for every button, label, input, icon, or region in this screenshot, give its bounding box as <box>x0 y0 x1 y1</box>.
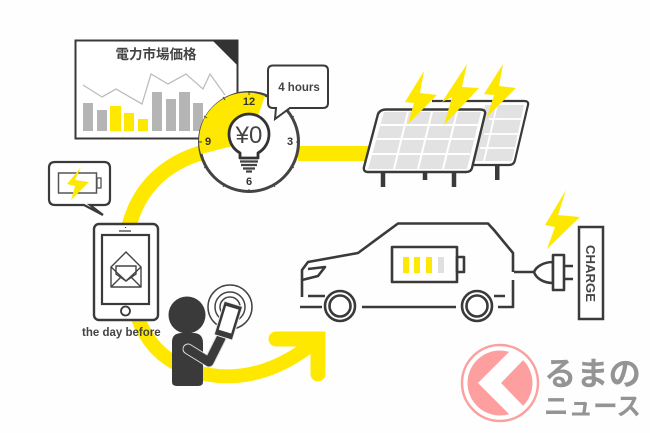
arrow: yellow flow band from solar panels through clock <box>298 146 372 161</box>
icon: lightning bolt above charger <box>545 190 580 249</box>
callout: 4 hours: 4 hours <box>278 82 320 94</box>
battery level <box>392 247 464 282</box>
callout: 4 hours <box>268 66 328 119</box>
arm <box>188 338 221 362</box>
icon: lightning bolts <box>405 64 516 125</box>
icon: electric car <box>300 224 513 321</box>
rear wheel <box>462 291 492 321</box>
charge station sign <box>579 227 603 319</box>
arrow: yellow flow band from tablet to car <box>138 318 318 376</box>
bar chart <box>83 92 203 131</box>
front solar panel <box>364 110 485 187</box>
arrow: yellow flow band from clock to tablet <box>129 152 204 226</box>
clock numerals <box>205 96 293 188</box>
clock numerals: 3 <box>287 136 293 148</box>
icon: tablet with envelope <box>94 224 158 320</box>
chart title: 電力市場価格 <box>116 46 197 62</box>
icon: light bulb: ¥0 <box>235 122 262 149</box>
rear solar panel <box>432 101 528 180</box>
clock numerals: 9 <box>205 136 211 148</box>
icon: solar panels <box>364 64 528 187</box>
clock numerals: 6 <box>246 176 252 188</box>
icon: clock with light bulb <box>198 91 300 193</box>
label: the day before: the day before <box>82 327 161 339</box>
smartphone <box>214 301 243 340</box>
logo text: るまの <box>544 356 641 392</box>
clock numerals: 12 <box>243 96 255 108</box>
line chart <box>83 74 225 104</box>
logo subtitle: ニュース <box>544 393 641 421</box>
icon: charging plug and cable <box>514 255 573 290</box>
charge station sign: CHARGE <box>583 245 598 302</box>
logo: Kuruma no News <box>462 345 641 421</box>
callout: battery charging <box>49 162 110 215</box>
icon: open envelope <box>111 252 141 287</box>
front wheel <box>325 291 355 321</box>
icon: person tapping smartphone <box>168 285 252 386</box>
panel: electricity market price chart <box>76 40 238 138</box>
signal rings <box>208 285 252 329</box>
